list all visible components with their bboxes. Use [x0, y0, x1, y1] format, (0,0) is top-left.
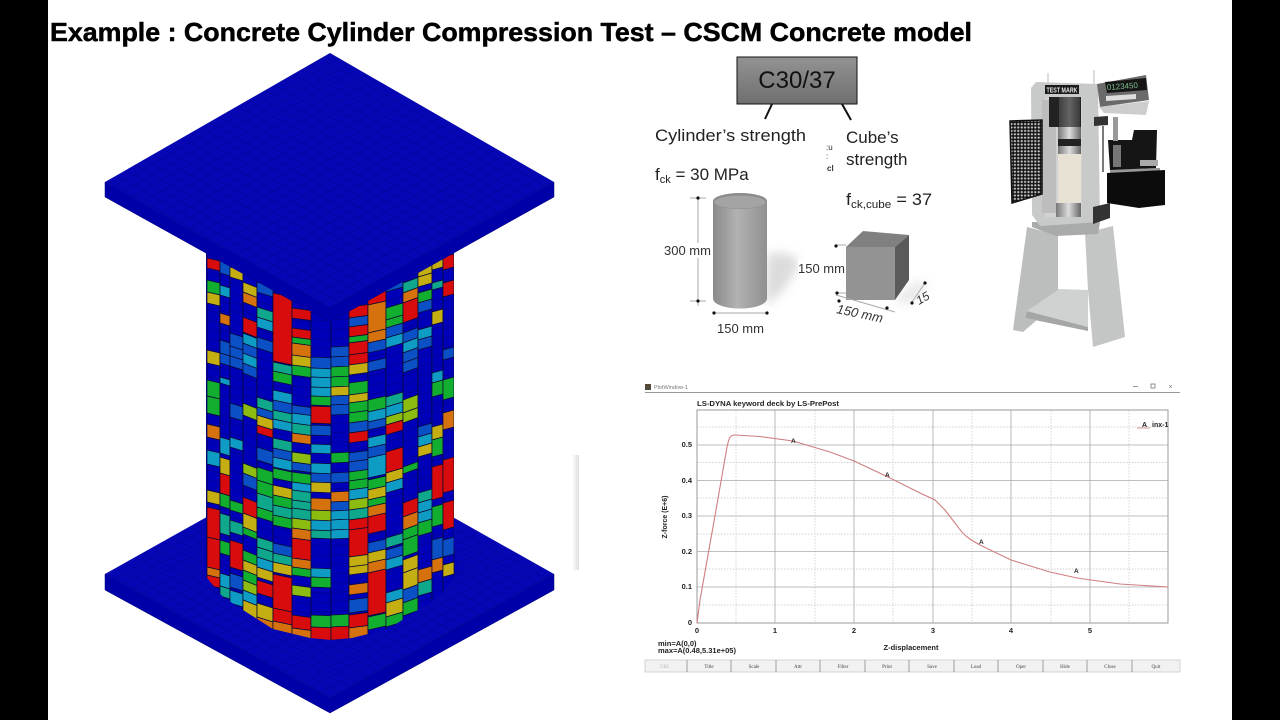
clipped text fragments: cl — [827, 164, 834, 173]
y axis labels: 0.3 — [682, 511, 692, 520]
y axis labels: 0 — [688, 618, 692, 627]
button bar: Filter — [838, 665, 849, 670]
damaged concrete cylinder mesh — [203, 250, 458, 640]
button bar: Load — [971, 665, 982, 670]
legend — [1137, 422, 1168, 429]
bottom steel plate — [105, 448, 554, 713]
hydraulic pump — [1107, 117, 1165, 208]
compression testing machine — [1010, 70, 1165, 347]
test mark label — [1045, 85, 1079, 94]
x axis labels: 0 — [695, 626, 699, 635]
force displacement curve — [697, 435, 1168, 623]
grade box: C30/37: C30/37 — [758, 67, 836, 94]
clipped text fragments: :u — [826, 143, 833, 152]
cylinder strength text: ck — [660, 174, 671, 186]
cube strength text: = 37 — [891, 190, 932, 209]
button bar: Hide — [1060, 665, 1071, 670]
x axis labels: 5 — [1088, 626, 1092, 635]
button bar: Quit — [1152, 665, 1161, 670]
x axis labels: 1 — [773, 626, 777, 635]
cylinder strength text: Cylinder’s strength — [655, 126, 806, 145]
connector: grade to cylinder — [765, 104, 772, 119]
button bar: Print — [882, 665, 892, 670]
x axis labels — [695, 626, 1092, 635]
min max note: min=A(0,0) — [658, 639, 697, 648]
cylinder strength text — [655, 126, 806, 186]
top steel plate — [105, 53, 554, 322]
finite element model: concrete cylinder between plates — [105, 53, 554, 713]
mesh door — [1010, 120, 1042, 203]
small artefact stripe — [572, 455, 579, 570]
legend: inx-1 — [1152, 422, 1168, 429]
cylinder specimen with dimensions: 150 mm — [717, 321, 764, 336]
button bar: Close — [1104, 665, 1116, 670]
plot grid and axes — [697, 410, 1168, 623]
button bar: Oper — [1016, 665, 1026, 670]
min max note: max=A(0.48,5.31e+05) — [658, 646, 736, 655]
x axis labels: 4 — [1009, 626, 1014, 635]
x axis labels: 2 — [852, 626, 856, 635]
y axis labels: 0.2 — [682, 547, 692, 556]
cube specimen with dimensions: 150 mm — [835, 301, 885, 326]
right black bar — [1232, 0, 1280, 720]
x axis title: Z-displacement — [883, 643, 939, 652]
y axis labels: 0.1 — [682, 582, 692, 591]
window title bar: PlotWindow-1 — [654, 385, 688, 391]
curve markers: A — [791, 438, 796, 445]
button bar: URL — [660, 665, 670, 670]
button bar: Scale — [749, 665, 760, 670]
cylinder strength text: f — [655, 165, 660, 184]
cube strength text: strength — [846, 150, 907, 169]
cube specimen with dimensions: 150 mm — [798, 261, 845, 276]
min max note — [658, 639, 736, 655]
cube specimen with dimensions — [798, 231, 932, 326]
grade box: C30/37 — [737, 57, 857, 104]
button bar: Save — [927, 665, 938, 670]
legend: A — [1142, 422, 1147, 429]
button bar: Attr — [794, 665, 802, 670]
curve markers — [791, 438, 1079, 575]
machine stand — [1013, 222, 1125, 347]
curve markers: A — [979, 539, 984, 546]
cube strength text: ck,cube — [851, 199, 891, 211]
cylinder specimen with dimensions — [664, 193, 798, 336]
connector: grade to cube — [842, 104, 851, 120]
window title bar — [645, 384, 1180, 393]
x axis labels: 3 — [931, 626, 935, 635]
cylinder specimen with dimensions: 300 mm — [664, 243, 711, 258]
digital display: 0123450 — [1107, 81, 1139, 92]
button bar — [645, 660, 1180, 672]
y axis labels: 0.4 — [682, 476, 693, 485]
y axis labels — [682, 440, 693, 627]
cube specimen with dimensions: 15 — [914, 289, 932, 308]
plot title: LS-DYNA keyword deck by LS-PrePost — [697, 399, 840, 408]
y axis title: Z-force (E+6) — [662, 496, 669, 538]
window title bar: × — [1168, 384, 1173, 391]
curve markers: A — [885, 472, 890, 479]
clipped text fragments: : — [826, 152, 828, 161]
y axis labels: 0.5 — [682, 440, 692, 449]
clipped text fragments — [826, 143, 834, 173]
cube strength text — [846, 128, 932, 211]
LS-DYNA plot window — [645, 384, 1180, 672]
upper platen and specimen — [1049, 97, 1081, 217]
cube strength text: Cube’s — [846, 128, 899, 147]
curve markers: A — [1074, 568, 1079, 575]
test mark label: TEST MARK — [1046, 88, 1078, 94]
left black bar — [0, 0, 48, 720]
button bar: Title — [704, 665, 714, 670]
digital display — [1097, 75, 1149, 115]
cylinder strength text: = 30 MPa — [671, 165, 749, 184]
cube strength text: f — [846, 190, 851, 209]
title: Example : Concrete Cylinder Compression Test – CSCM Concrete model — [50, 17, 972, 47]
machine frame — [1031, 70, 1110, 226]
